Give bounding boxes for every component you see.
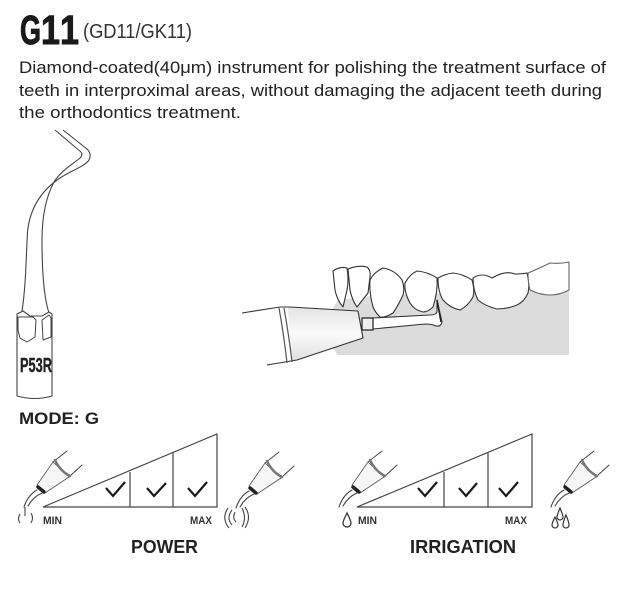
dental illustration xyxy=(242,262,569,365)
model label: P53R xyxy=(20,355,52,377)
gum xyxy=(329,289,569,355)
scaler tip xyxy=(373,300,442,329)
handpiece xyxy=(242,307,363,365)
title: 1 xyxy=(60,7,79,53)
instrument tip P53R xyxy=(17,130,90,398)
title: (GD11/GK11) xyxy=(83,21,192,43)
title: 1 xyxy=(41,7,60,53)
irrigation check marks xyxy=(418,482,518,496)
power scale triangle xyxy=(43,434,217,507)
panel: irrigation: MAX xyxy=(505,515,528,527)
mode label: MODE: G xyxy=(19,409,99,428)
connector xyxy=(362,318,373,330)
panel: irrigation xyxy=(339,434,609,557)
description text: the orthodontics treatment. xyxy=(19,103,241,122)
title xyxy=(20,7,192,53)
power heading: POWER xyxy=(131,537,198,557)
title: G xyxy=(20,7,41,53)
irrigation heading: IRRIGATION xyxy=(410,537,516,557)
irrigation scale triangle xyxy=(357,434,532,507)
description text: Diamond-coated(40μm) instrument for polishing the treatment surface of xyxy=(19,58,606,77)
description text: teeth in interproximal areas, without damaging the adjacent teeth during xyxy=(19,81,602,100)
teeth xyxy=(333,262,569,317)
irrigation scale labels: MIN xyxy=(358,515,377,527)
power scale labels: MIN xyxy=(43,515,62,527)
power min handpiece xyxy=(18,451,82,523)
panel: power: MAX xyxy=(190,515,213,527)
irrigation max handpiece xyxy=(551,451,609,528)
power check marks xyxy=(106,482,207,496)
panel: power xyxy=(18,434,294,557)
power max handpiece xyxy=(225,452,294,528)
description text xyxy=(19,58,606,122)
irrigation min handpiece xyxy=(339,451,397,527)
